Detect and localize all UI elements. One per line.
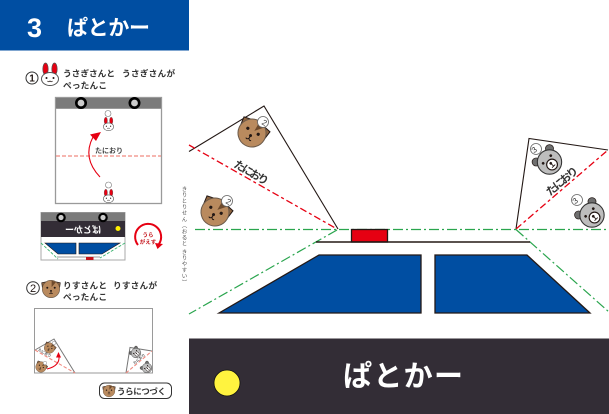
diagram: flipped mini car: ぱとかー [65, 225, 101, 235]
headlight [214, 370, 240, 396]
bear flap [516, 138, 608, 229]
number badge top: 2 [260, 118, 269, 128]
siren light [352, 230, 388, 242]
step 2 heading: ぺったんこ [63, 292, 107, 302]
fold label: たにおり [95, 146, 123, 155]
header bar [0, 0, 189, 50]
flip arrow [135, 224, 163, 249]
step 1 heading: 1 [29, 74, 35, 84]
diagram: folding the squirrel and bear flaps: たにおり [132, 352, 146, 365]
fold line left [189, 145, 337, 229]
continue on back button: うらにつづく [117, 386, 166, 396]
step 1 heading: ぺったんこ [63, 80, 107, 90]
panel label: ぱとかー [343, 360, 463, 393]
fold line right [516, 150, 608, 229]
number badge bear: 3 [530, 145, 539, 155]
heading title: ぱとかー [67, 17, 150, 40]
cut line note: きりとりせん（おると きりやすい） [180, 186, 187, 285]
heading number: 3 [27, 13, 42, 43]
fold label left: たにおり [232, 158, 271, 188]
number badge top [258, 116, 269, 128]
diagram: folding the bunny flap [56, 98, 162, 204]
squirrel flap [189, 106, 338, 229]
left window [219, 255, 421, 313]
squirrel sticker target [195, 192, 235, 232]
step 1 heading: うさぎさんと [63, 68, 115, 78]
flip arrow: うら [142, 232, 154, 239]
step 2 heading: 2 [30, 283, 36, 295]
step 1 heading [26, 63, 175, 90]
right window [435, 255, 590, 313]
step 1 heading: うさぎさんが [122, 68, 175, 78]
step 2 heading [27, 280, 157, 302]
fold label right: たにおり [544, 164, 581, 199]
diagram: folding the squirrel and bear flaps [33, 308, 154, 375]
diagram: folding the squirrel and bear flaps: たにおり [37, 347, 52, 358]
step 2 heading: りすさんが [113, 280, 157, 290]
flip arrow: がえす [140, 238, 157, 246]
squirrel sticker target: 2 [224, 197, 233, 207]
green cut lines [189, 230, 609, 314]
bear sticker target: 3 [571, 196, 580, 206]
car body panel [189, 338, 609, 414]
bear face top [530, 143, 568, 180]
roof line [316, 241, 530, 243]
step 2 heading: りすさんと [63, 280, 107, 290]
fold arrow [89, 137, 100, 177]
continue on back button [100, 383, 172, 398]
squirrel face top [232, 113, 272, 153]
bear sticker target [571, 194, 609, 233]
diagram: flipped mini car [41, 212, 125, 260]
